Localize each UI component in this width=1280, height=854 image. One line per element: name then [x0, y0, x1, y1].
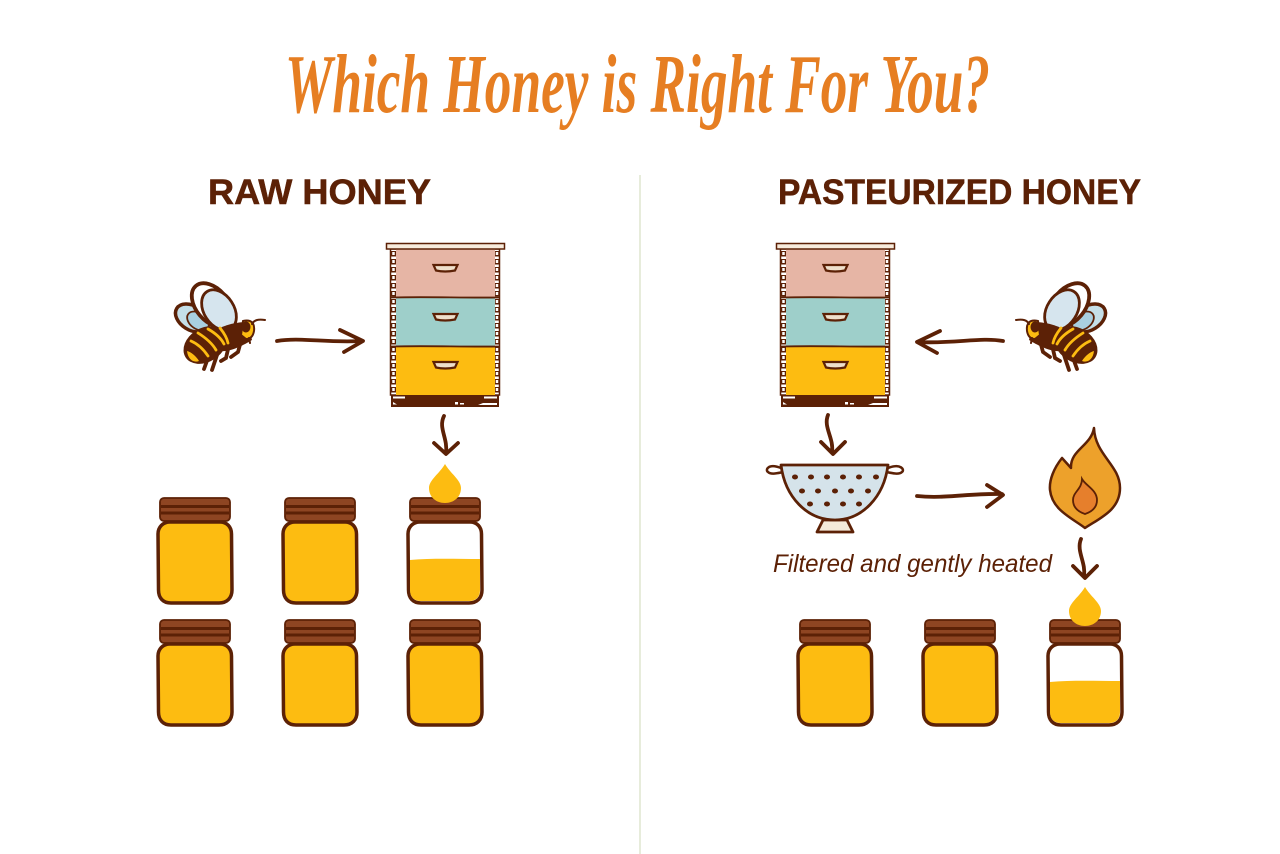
icon: colander [767, 465, 903, 532]
heading: raw honey: RAW HONEY [208, 173, 431, 212]
icon: bee flying left [1016, 276, 1111, 372]
icon: honey drop [429, 464, 461, 503]
jar 1 [798, 620, 872, 725]
center divider [639, 175, 641, 854]
caption: filtered and gently heated: Filtered and gently heated [773, 550, 1053, 578]
panel: pasteurized honey [767, 173, 1141, 725]
arrow: hive to colander [821, 415, 845, 454]
jar 5 [283, 620, 357, 725]
jar 2 [283, 498, 357, 603]
icon: flame [1050, 428, 1120, 528]
arrow: colander to flame [917, 485, 1003, 507]
icon: beehive [386, 244, 504, 407]
jar 2 [923, 620, 997, 725]
jar 1 [158, 498, 232, 603]
heading: pasteurized honey: PASTEURIZED HONEY [778, 173, 1141, 212]
jar 3: partly filled [1048, 620, 1122, 725]
arrow: bee to hive [277, 330, 363, 352]
arrow: hive to jars [434, 416, 458, 454]
panel: raw honey [158, 173, 504, 725]
jar 6 [408, 620, 482, 725]
arrow: bee to hive [917, 331, 1003, 353]
jar 4 [158, 620, 232, 725]
jar 3: partly filled [408, 498, 482, 603]
jars: raw honey [158, 498, 482, 725]
icon: bee flying right [170, 276, 265, 372]
jars: pasteurized honey [798, 620, 1122, 725]
icon: beehive [776, 244, 894, 407]
arrow: flame to jars [1073, 539, 1097, 578]
icon: honey drop [1069, 587, 1101, 626]
